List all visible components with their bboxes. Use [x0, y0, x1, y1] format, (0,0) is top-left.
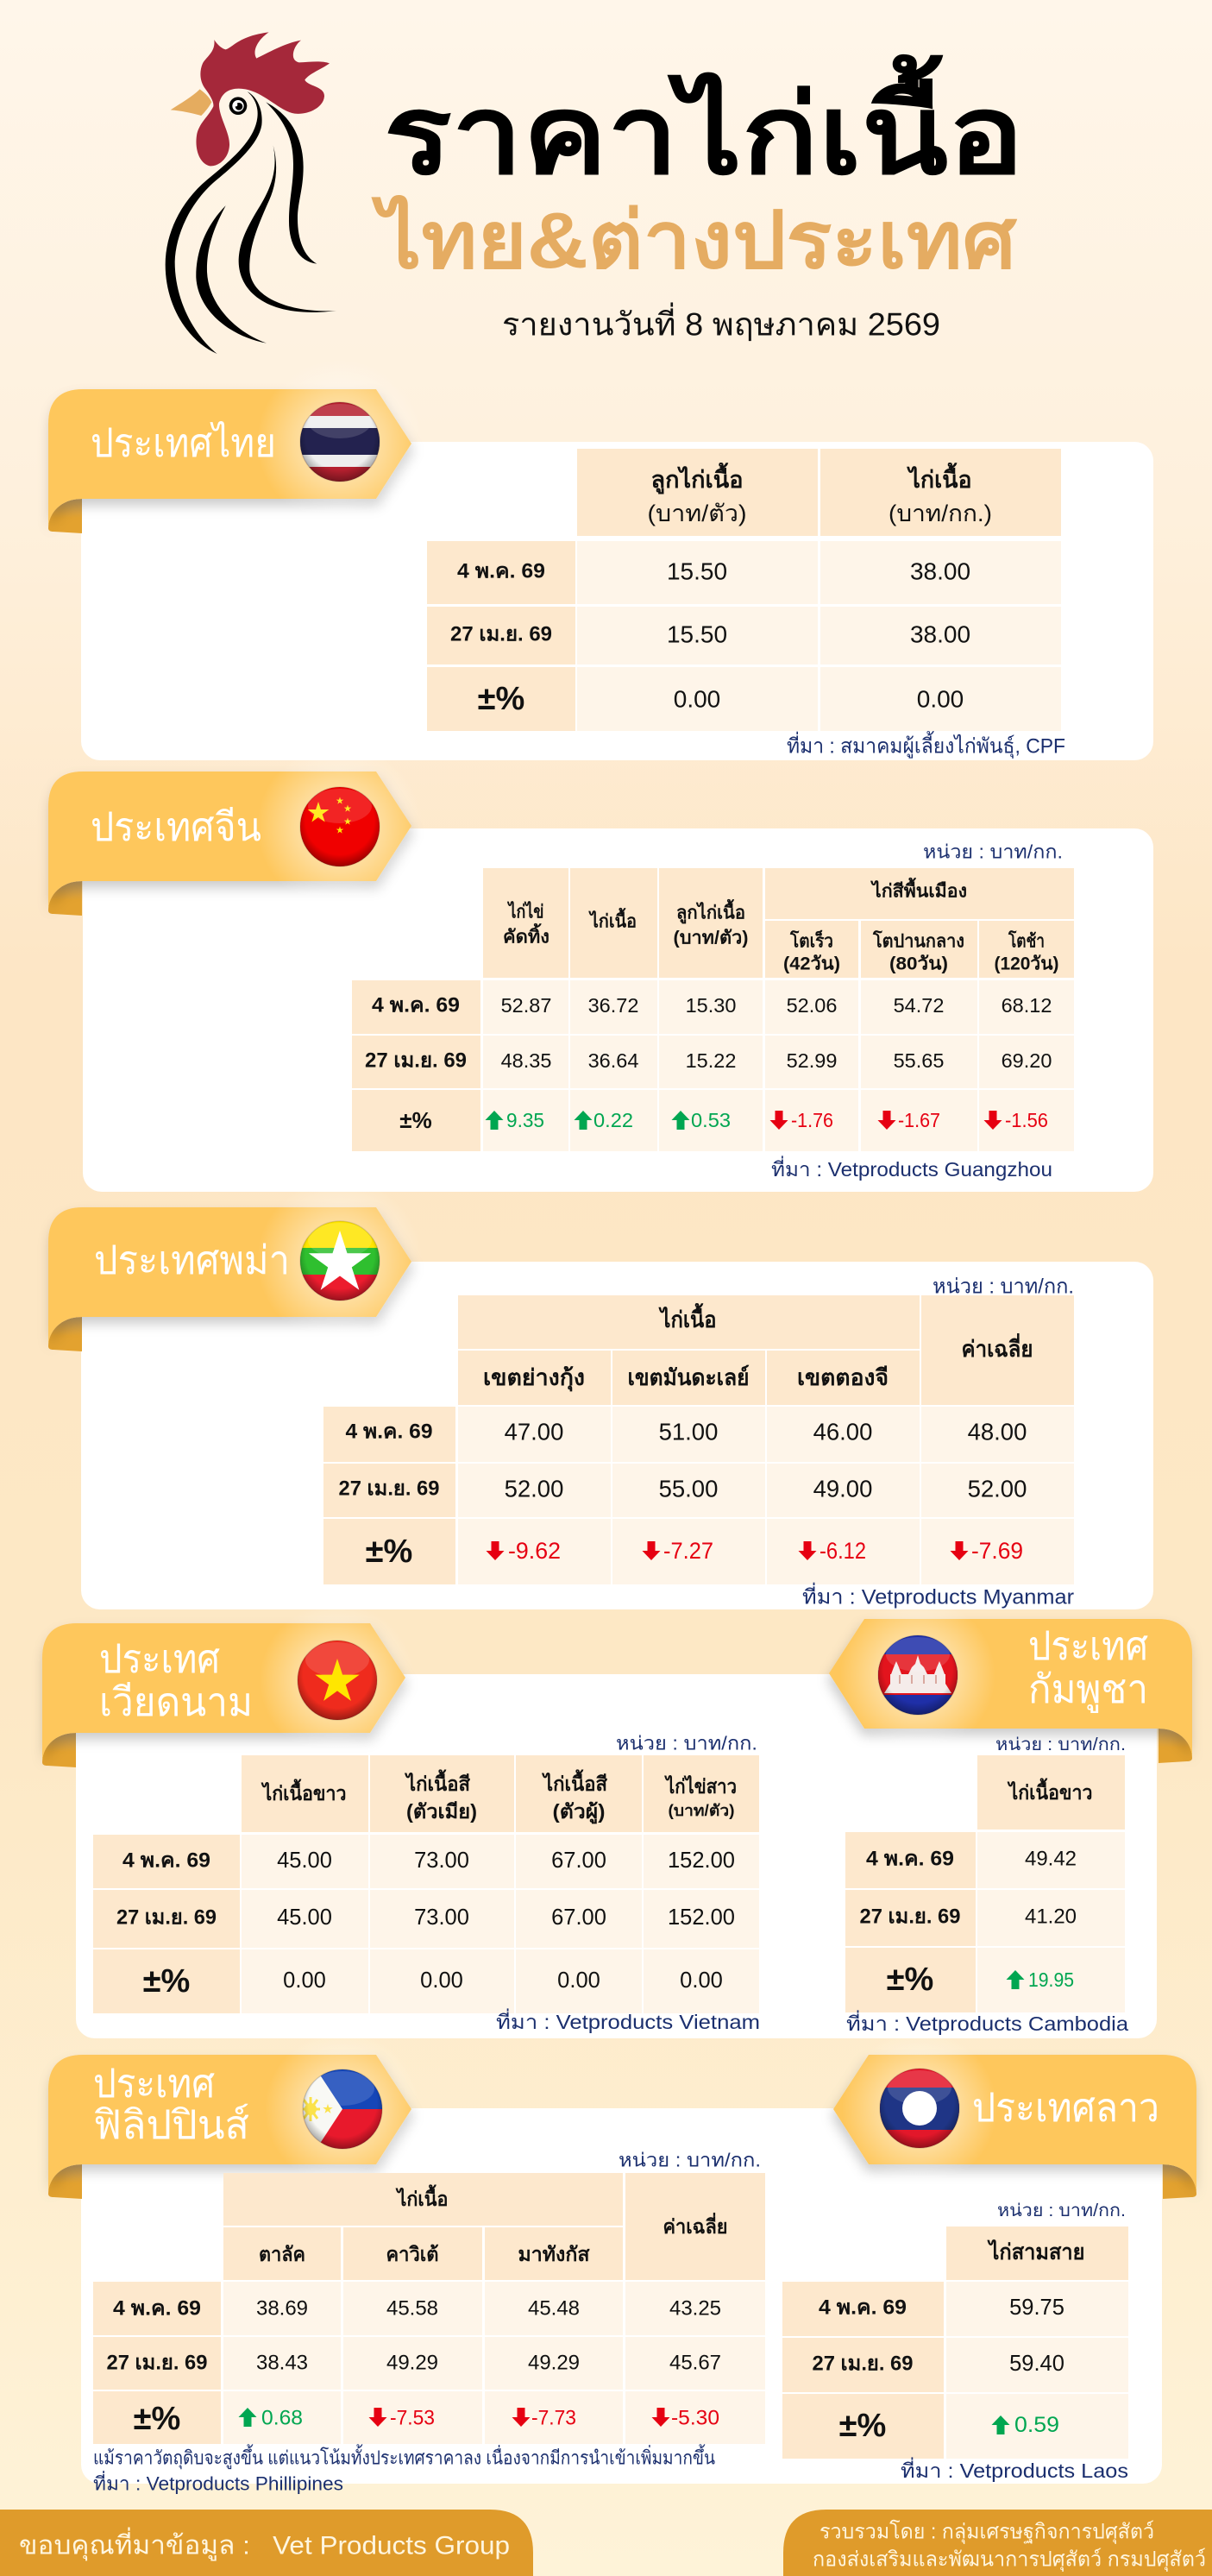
header row: ค่าเฉลี่ย [663, 2212, 728, 2238]
footer: compiled by [783, 2510, 1212, 2576]
change down -6.12: -6.12 [820, 1538, 866, 1564]
row: 4 May: 54.72 [894, 994, 944, 1017]
row: percent change: 0.00 [283, 1968, 326, 1993]
change up 0.68: 0.68 [261, 2406, 303, 2430]
change up 0.59 [992, 2413, 1059, 2437]
row: 27 April: 67.00 [551, 1905, 606, 1930]
row: 4 May: 52.87 [501, 994, 551, 1017]
footer: compiled by: รวบรวมโดย : กลุ่มเศรษฐกิจการปศุสัตว์ [820, 2520, 1154, 2544]
row: percent change: 0.00 [917, 685, 964, 713]
row: 4 May [93, 2282, 765, 2335]
header row: (บาท/กก.) [889, 501, 992, 526]
header row: ตาลัค [259, 2243, 305, 2265]
ribbon: Thailand [48, 389, 411, 533]
row: 4 May: 4 พ.ค. 69 [372, 994, 460, 1017]
row: 4 May: 4 พ.ค. 69 [122, 1849, 210, 1873]
row: percent change [427, 667, 1061, 731]
row: 4 May: 43.25 [669, 2297, 721, 2320]
source: ที่มา : Vetproducts Myanmar [802, 1583, 1074, 1609]
row: 4 May: 47.00 [505, 1419, 563, 1445]
row: percent change: 0.00 [680, 1968, 723, 1993]
change up 0.53 [671, 1109, 731, 1131]
row: 4 May: 15.50 [667, 557, 727, 585]
ribbon label: ประเทศ [93, 2061, 215, 2106]
row: percent change: ±% [399, 1107, 432, 1133]
ribbon label: กัมพูชา [1028, 1666, 1148, 1713]
change up 0.53: 0.53 [691, 1109, 731, 1131]
flag: China [262, 763, 411, 885]
ribbon label: ฟิลิปปินส์ [93, 2102, 249, 2147]
row: 4 May [845, 1832, 1125, 1888]
panel: Myanmar [48, 1178, 1153, 1609]
flag: Myanmar [263, 1194, 411, 1320]
header row: ไก่เนื้อ [588, 908, 637, 932]
panel: China [48, 744, 1153, 1192]
row: 27 April: 45.67 [669, 2351, 721, 2375]
change down -1.56 [983, 1109, 1048, 1131]
row: percent change [93, 1949, 759, 2013]
row: 27 April: 49.29 [386, 2351, 438, 2375]
row: 4 May: 48.00 [968, 1419, 1027, 1445]
row: 4 May: 59.75 [1009, 2296, 1064, 2320]
header row [483, 868, 1074, 978]
row: 4 May: 49.42 [1025, 1847, 1077, 1871]
header row: ลูกไก่เนื้อ [676, 899, 745, 925]
table: Vietnam [93, 1755, 759, 2013]
row: percent change: ±% [366, 1534, 412, 1570]
row: percent change: ±% [478, 681, 524, 717]
card [76, 1674, 1157, 2038]
header row: ไก่เนื้อสี [404, 1769, 471, 1795]
change down -6.12 [799, 1538, 866, 1564]
row: 27 April: 38.00 [910, 621, 970, 647]
row: 4 May: 4 พ.ค. 69 [819, 2296, 907, 2320]
change up 19.95 [1006, 1968, 1074, 1991]
unit note: หน่วย : บาท/กก. [933, 1275, 1074, 1298]
header row: ไก่ไข่สาว [663, 1774, 737, 1798]
header row: (บาท/ตัว) [647, 501, 747, 526]
header row: โตปานกลาง [872, 930, 964, 951]
row: 27 April [93, 1890, 759, 1948]
header row: ไก่เนื้อ [658, 1302, 716, 1332]
row: 27 April: 15.22 [686, 1049, 736, 1072]
row: 27 April: 73.00 [414, 1905, 469, 1930]
header row: เขตตองจี [797, 1364, 889, 1390]
row: 27 April: 48.35 [501, 1049, 551, 1072]
card [83, 828, 1153, 1192]
ribbon label: ประเทศไทย [91, 420, 276, 465]
row: 27 April: 59.40 [1009, 2352, 1064, 2376]
row: percent change: ±% [839, 2408, 886, 2444]
card [81, 442, 1153, 760]
row: 4 May: 45.48 [528, 2297, 580, 2320]
card [81, 2108, 1162, 2484]
header row: (บาท/ตัว) [668, 1802, 735, 1819]
report date: รายงานวันที่ 8 พฤษภาคม 2569 [502, 302, 940, 342]
header row [977, 1755, 1125, 1830]
row: 27 April: 27 เม.ย. 69 [450, 623, 552, 646]
table: Philippines [93, 2173, 765, 2444]
row: 4 May: 38.69 [256, 2297, 308, 2320]
row: 27 April: 152.00 [668, 1905, 735, 1930]
change down -1.56: -1.56 [1005, 1109, 1048, 1131]
ribbon: Laos [833, 2055, 1196, 2199]
row: 27 April: 52.00 [968, 1476, 1027, 1502]
source: ที่มา : Vetproducts Phillipines [93, 2470, 343, 2494]
row: percent change [845, 1948, 1125, 2012]
row: 4 May [782, 2282, 1128, 2336]
header row: (บาท/ตัว) [673, 929, 749, 948]
panel: Vietnam and Cambodia [42, 1597, 1192, 2038]
header row [458, 1295, 1074, 1405]
flag: Thailand [262, 387, 411, 501]
change up 0.22: 0.22 [593, 1109, 633, 1131]
header row: โตช้า [1008, 930, 1045, 951]
row: 4 May: 15.30 [686, 994, 736, 1017]
change down -7.53 [369, 2406, 435, 2430]
header row: โตเร็ว [789, 929, 833, 951]
header row [946, 2226, 1128, 2280]
ribbon label: ประเทศพม่า [94, 1238, 290, 1282]
row: 27 April [845, 1890, 1125, 1946]
table: China [352, 868, 1074, 1151]
subtitle: ไทย&ต่างประเทศ [370, 195, 1018, 285]
icon: rooster logo [166, 32, 336, 354]
row: 27 April: 52.00 [505, 1476, 563, 1502]
row: 4 May: 45.00 [277, 1849, 332, 1873]
card [81, 1262, 1153, 1609]
row: 27 April: 27 เม.ย. 69 [859, 1905, 961, 1928]
ribbon: Cambodia [829, 1619, 1192, 1763]
row: 27 April [782, 2338, 1128, 2392]
header row: (80วัน) [889, 954, 948, 973]
flag: Laos [847, 2047, 990, 2166]
row: 4 May [323, 1407, 1074, 1462]
row: 4 May: 36.72 [588, 994, 638, 1017]
row: 4 May: 51.00 [659, 1419, 718, 1445]
header row: ลูกไก่เนื้อ [650, 462, 744, 494]
change up 0.68 [238, 2406, 303, 2430]
header row [577, 449, 1061, 536]
change down -7.53: -7.53 [390, 2406, 435, 2430]
row: 27 April: 27 เม.ย. 69 [107, 2351, 207, 2375]
row: percent change [93, 2391, 765, 2444]
header row: คาวิเต้ [386, 2243, 438, 2265]
ribbon label [93, 2061, 249, 2147]
ribbon label: ประเทศ [99, 1636, 220, 1681]
row: 4 May [93, 1835, 759, 1888]
header row: คัดทิ้ง [503, 923, 549, 948]
change down -5.30: -5.30 [671, 2406, 719, 2430]
row: 4 May: 45.58 [386, 2297, 438, 2320]
change down -1.76: -1.76 [791, 1109, 833, 1131]
header row: (120วัน) [994, 954, 1059, 973]
row: percent change: ±% [143, 1963, 190, 2000]
panel: Thailand [48, 359, 1153, 760]
row: percent change [352, 1090, 1074, 1151]
header row: (ตัวผู้) [552, 1800, 606, 1824]
header row: มาทังกัส [518, 2243, 590, 2265]
ribbon: Vietnam [42, 1623, 405, 1767]
header row [242, 1755, 759, 1832]
change down -7.69: -7.69 [971, 1538, 1023, 1564]
row: 27 April: 49.00 [813, 1476, 872, 1502]
panel: Philippines and Laos [48, 2031, 1196, 2494]
row: 27 April: 41.20 [1025, 1905, 1077, 1928]
footer: data credit: ขอบคุณที่มาข้อมูล : Vet Products Group [19, 2527, 510, 2561]
row: 27 April: 38.43 [256, 2351, 308, 2375]
row: 4 May: 68.12 [1002, 994, 1052, 1017]
header row: ไก่สีพื้นเมือง [870, 877, 967, 901]
table: Cambodia [845, 1755, 1125, 2012]
row: 27 April [427, 607, 1061, 664]
row: 27 April: 52.99 [787, 1049, 837, 1072]
source: ที่มา : Vetproducts Vietnam [496, 2008, 760, 2033]
change up 0.22 [575, 1109, 633, 1131]
unit note: หน่วย : บาท/กก. [995, 1735, 1126, 1754]
row: 27 April: 15.50 [667, 621, 727, 647]
header row: ไก่ไข่ [507, 901, 543, 922]
ribbon label: ประเทศจีน [91, 804, 261, 849]
header row: ไก่สามสาย [987, 2239, 1085, 2264]
ribbon: Philippines [48, 2055, 411, 2199]
header row: (42วัน) [783, 954, 840, 973]
header row: ไก่เนื้อ [907, 462, 971, 493]
title: ราคาไก่เนื้อ [384, 54, 1024, 197]
table: Laos [782, 2226, 1128, 2459]
unit note: หน่วย : บาท/กก. [616, 1733, 757, 1754]
row: 4 May [427, 541, 1061, 604]
header row: เขตมันดะเลย์ [628, 1364, 749, 1390]
change down -7.73 [512, 2406, 576, 2430]
unit note: หน่วย : บาท/กก. [923, 841, 1063, 863]
row: percent change: ±% [134, 2401, 180, 2437]
ribbon label: ประเทศ [1028, 1623, 1148, 1668]
source: ที่มา : Vetproducts Guangzhou [771, 1156, 1052, 1181]
change down -9.62: -9.62 [508, 1538, 561, 1564]
header row: ค่าเฉลี่ย [961, 1332, 1033, 1362]
row: 4 May: 152.00 [668, 1849, 735, 1873]
row: 27 April: 69.20 [1002, 1049, 1052, 1072]
header row: ไก่เนื้อสี [541, 1769, 608, 1795]
change up 9.35 [485, 1109, 544, 1131]
row: 27 April [323, 1464, 1074, 1517]
row: 27 April [93, 2337, 765, 2390]
row: 27 April: 36.64 [588, 1049, 638, 1072]
row: 27 April: 27 เม.ย. 69 [116, 1905, 217, 1930]
change down -1.67: -1.67 [898, 1109, 940, 1131]
table: Thailand [427, 449, 1061, 731]
row: 4 May: 4 พ.ค. 69 [457, 559, 545, 583]
row: 27 April: 27 เม.ย. 69 [338, 1477, 440, 1500]
row: percent change: 0.00 [557, 1968, 600, 1993]
row: percent change [323, 1519, 1074, 1584]
change up 0.59: 0.59 [1014, 2413, 1059, 2437]
change down -7.27: -7.27 [663, 1538, 713, 1564]
change down -1.67 [878, 1109, 940, 1131]
ribbon label [99, 1636, 253, 1724]
header row: ไก่เนื้อขาว [1007, 1778, 1092, 1804]
footer: data credit [0, 2510, 533, 2576]
ribbon label: ประเทศลาว [972, 2085, 1159, 2130]
ribbon label: เวียดนาม [99, 1679, 253, 1724]
row: 27 April [352, 1036, 1074, 1088]
row: percent change: 0.00 [420, 1968, 463, 1993]
header row: ไก่เนื้อ [395, 2184, 449, 2210]
row: 27 April: 49.29 [528, 2351, 580, 2375]
header row: เขตย่างกุ้ง [483, 1364, 585, 1392]
table: Myanmar [323, 1295, 1074, 1584]
row: 4 May: 67.00 [551, 1849, 606, 1873]
source: ที่มา : Vetproducts Laos [901, 2457, 1128, 2482]
row: percent change [782, 2394, 1128, 2459]
footer: compiled by: กองส่งเสริมและพัฒนาการปศุสัตว์ กรมปศุสัตว์ [813, 2548, 1206, 2572]
ribbon: Myanmar [48, 1207, 411, 1351]
row: percent change: 0.00 [674, 685, 720, 713]
source: ที่มา : สมาคมผู้เลี้ยงไก่พันธุ์, CPF [787, 730, 1065, 759]
row: 27 April: 55.65 [894, 1049, 944, 1072]
row: 4 May: 46.00 [813, 1419, 872, 1445]
change down -1.76 [769, 1109, 833, 1131]
row: 4 May: 4 พ.ค. 69 [113, 2297, 201, 2320]
row: percent change: ±% [887, 1962, 933, 1998]
ribbon: China [48, 772, 411, 916]
flag: Vietnam [265, 1617, 405, 1736]
change down -7.69 [951, 1538, 1023, 1564]
change down -7.73: -7.73 [531, 2406, 576, 2430]
row: 4 May: 73.00 [414, 1849, 469, 1873]
change down -7.27 [642, 1538, 713, 1564]
row: 27 April: 27 เม.ย. 69 [813, 2352, 913, 2375]
row: 4 May: 38.00 [910, 557, 970, 585]
note: แม้ราคาวัตถุดิบจะสูงขึ้น แต่แนวโน้มทั้งประเทศราคาลง เนื่องจากมีการนำเข้าเพิ่มมากขึ้น [93, 2444, 715, 2470]
unit note: หน่วย : บาท/กก. [619, 2149, 761, 2171]
row: 4 May: 52.06 [787, 994, 837, 1017]
row: 27 April: 27 เม.ย. 69 [365, 1049, 467, 1072]
row: 27 April: 45.00 [277, 1905, 332, 1930]
change down -5.30 [652, 2406, 719, 2430]
row: 27 April: 55.00 [659, 1476, 718, 1502]
change up 19.95: 19.95 [1028, 1968, 1074, 1991]
row: 4 May [352, 980, 1074, 1034]
header row: ไก่เนื้อขาว [261, 1779, 347, 1804]
row: 4 May: 4 พ.ค. 69 [345, 1420, 433, 1443]
header row [223, 2173, 765, 2280]
source: ที่มา : Vetproducts Cambodia [846, 2010, 1128, 2035]
flag: Philippines [270, 2049, 411, 2166]
unit note: หน่วย : บาท/กก. [997, 2201, 1126, 2220]
flag: Cambodia [845, 1602, 990, 1731]
row: 4 May: 4 พ.ค. 69 [866, 1847, 954, 1871]
header row: (ตัวเมีย) [406, 1800, 477, 1823]
ribbon label [1028, 1623, 1148, 1713]
change up 9.35: 9.35 [506, 1109, 544, 1131]
